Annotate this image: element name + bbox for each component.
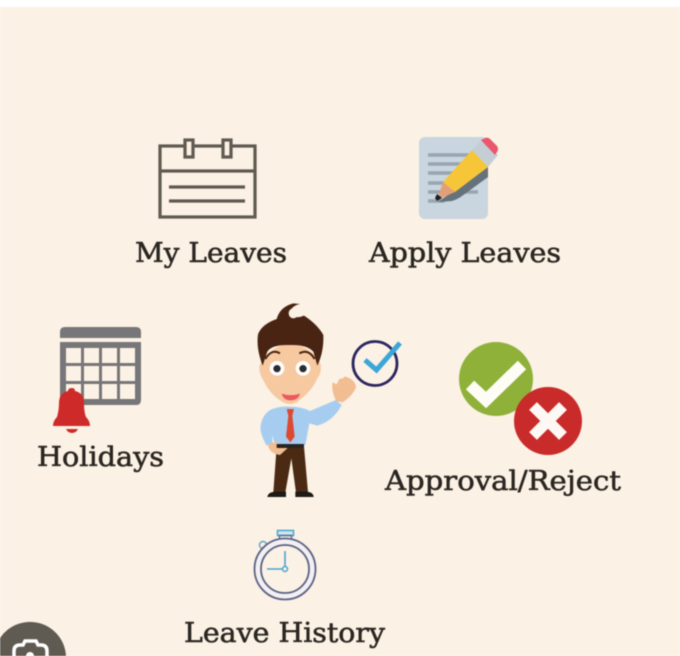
label: approval/reject: Approval/Reject: [384, 465, 621, 497]
legs: [273, 447, 308, 492]
shoes: [267, 492, 314, 497]
label: leave history: Leave History: [184, 617, 385, 649]
icon: check circle: [353, 342, 400, 386]
hair: [258, 303, 323, 366]
tie: [286, 409, 295, 442]
icon: approval and reject badges: [459, 342, 582, 455]
icon: stopwatch: [254, 530, 316, 600]
icon: my leaves calendar: [160, 140, 255, 217]
mouth: [282, 394, 300, 400]
icon: apply leaves pencil and document: [419, 137, 498, 219]
belt: [277, 444, 304, 448]
person character: [258, 303, 356, 497]
camera badge: [0, 622, 66, 656]
eyebrows: [265, 352, 315, 359]
label: holidays: Holidays: [37, 441, 164, 473]
icon: holidays calendar with bell: [53, 327, 141, 433]
waving hand: [332, 376, 356, 402]
eyes: [270, 361, 284, 376]
hair tuft: [289, 308, 298, 318]
label: apply leaves: Apply Leaves: [368, 237, 561, 269]
label: my leaves: My Leaves: [135, 237, 287, 269]
shirt: [260, 400, 342, 446]
hand on waist: [268, 442, 287, 455]
neck and face: [259, 342, 321, 404]
